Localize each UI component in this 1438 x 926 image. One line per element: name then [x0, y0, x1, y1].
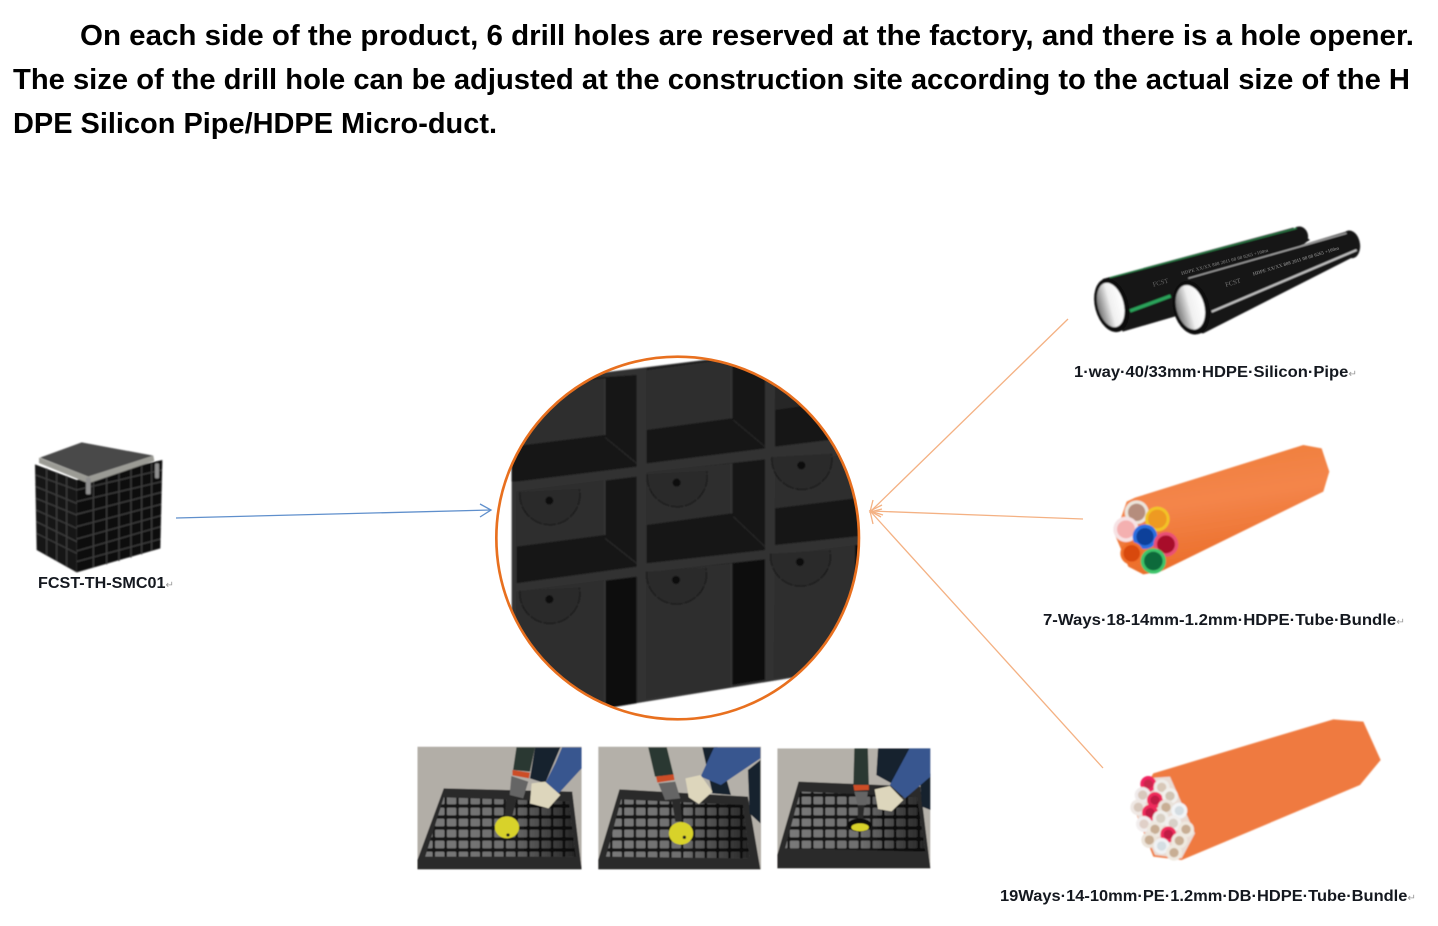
- icon: 19-way tube bundle: [1132, 719, 1381, 860]
- arrow: product to detail: [176, 504, 491, 518]
- icon: 7-way tube bundle: [1113, 445, 1329, 574]
- icon: HDPE silicon pipes: FCST: [1225, 278, 1242, 289]
- panel: magnified drill hole detail circle: [496, 339, 870, 724]
- floor diagonal edges: [605, 358, 765, 708]
- icon: HDPE silicon pipes: FCST: [1152, 278, 1169, 289]
- icon: product cube FCST-TH-SMC01: [35, 442, 162, 572]
- icon: HDPE silicon pipes: [1088, 224, 1362, 339]
- photos: hole opener drilling sequence: [417, 747, 930, 869]
- photo 3: [777, 747, 930, 868]
- arrow: silicon pipe to detail: [870, 319, 1068, 512]
- knockouts: [520, 489, 580, 525]
- photo 1: [417, 747, 582, 869]
- icon: HDPE silicon pipes: HDPE XX/XX 888 2011 08 08 0265 +100m: [1181, 249, 1270, 277]
- label: 1-way pipe: 1·way·40/33mm·HDPE·Silicon·Pipe ↵: [1074, 364, 1357, 381]
- icon: HDPE silicon pipes: HDPE XX/XX 888 2011 08 08 0265 +100m: [1252, 246, 1341, 278]
- arrow: 7-way bundle to detail: [870, 505, 1083, 519]
- heading text: The size of the drill hole can be adjusted at the construction site according to the actual size of the H: [13, 64, 1410, 96]
- column 1 cells: [512, 375, 637, 482]
- label: 7-way bundle: 7-Ways·18-14mm-1.2mm·HDPE·Tube·Bundle ↵: [1043, 612, 1405, 629]
- column 3 cells: [775, 406, 828, 446]
- arrow: 19-way bundle to detail: [870, 511, 1103, 768]
- heading text: On each side of the product, 6 drill holes are reserved at the factory, and there is a hole opener.: [80, 20, 1414, 52]
- panel body: [510, 360, 858, 706]
- column 2 cells: [647, 353, 765, 463]
- heading text: DPE Silicon Pipe/HDPE Micro-duct.: [13, 108, 497, 140]
- photo 2: [598, 747, 761, 869]
- heading text: [13, 20, 1414, 140]
- label: 19-way bundle: 19Ways·14-10mm·PE·1.2mm·DB·HDPE·Tube·Bundle ↵: [1000, 888, 1416, 905]
- label: FCST-TH-SMC01: FCST-TH-SMC01↵: [38, 575, 174, 592]
